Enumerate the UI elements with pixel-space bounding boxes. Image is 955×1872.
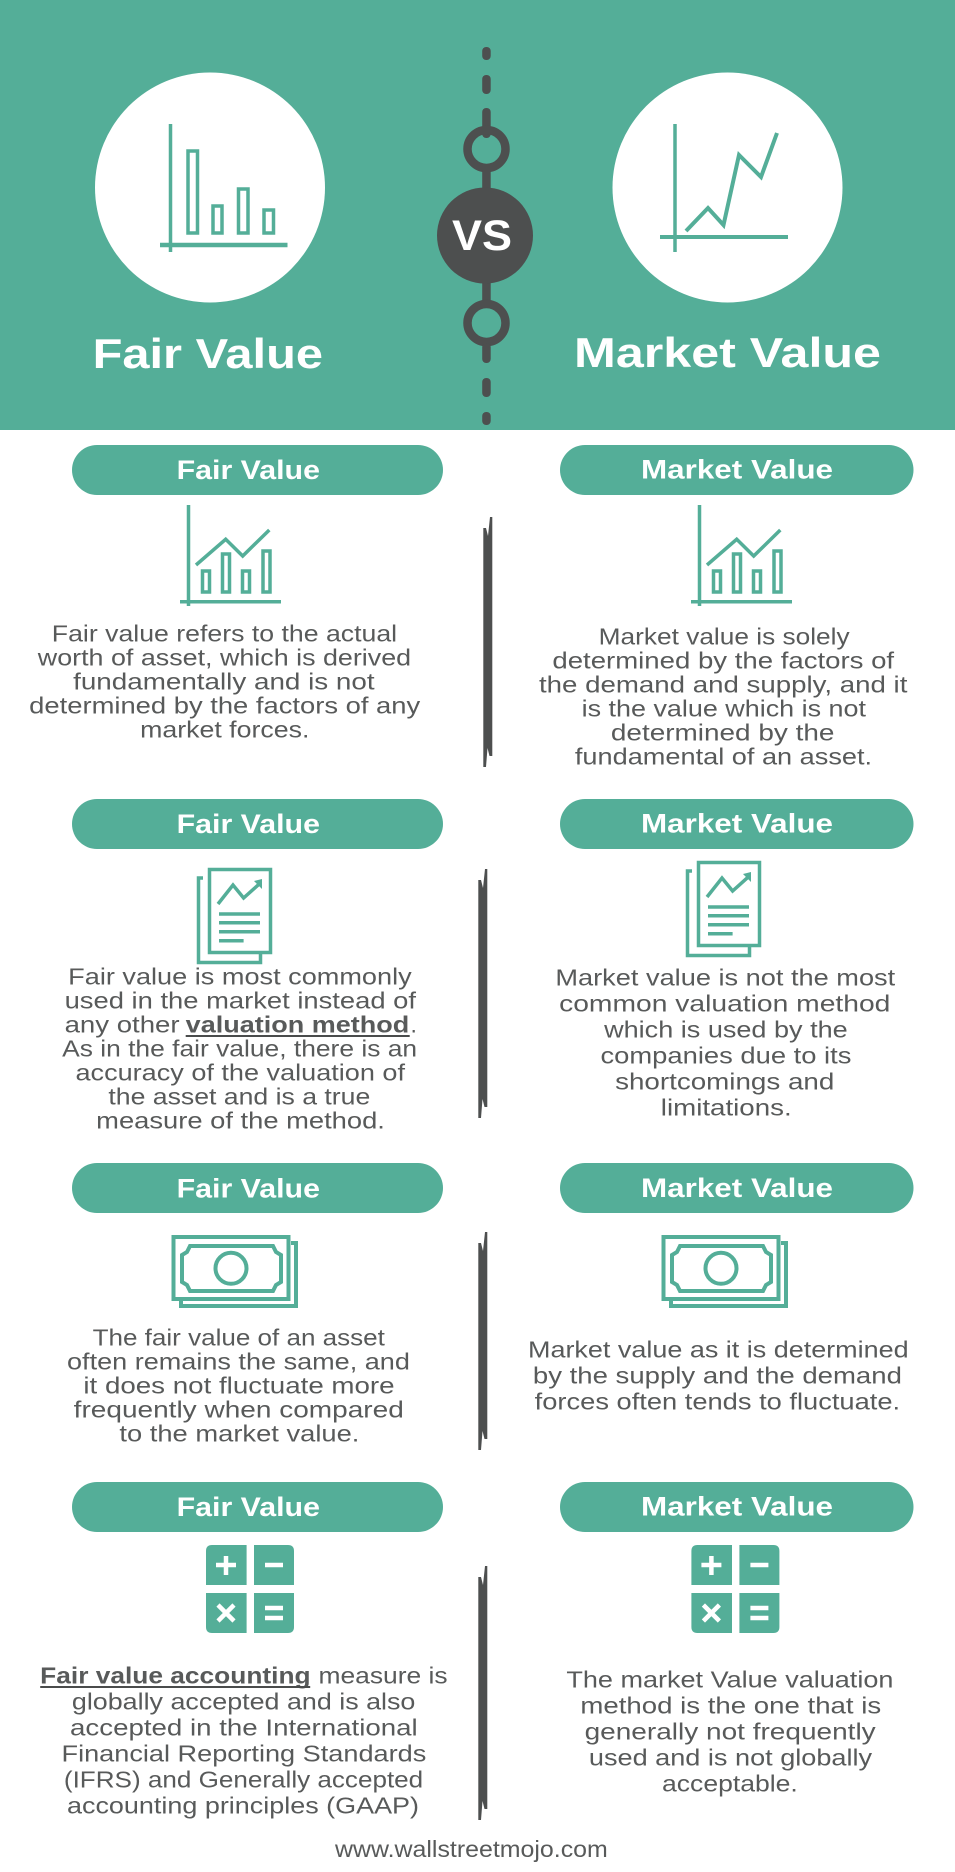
text: acceptance: generally not frequently	[585, 1718, 876, 1744]
text: usage: shortcomings and	[615, 1069, 834, 1095]
text: stability: often remains the same, and	[67, 1349, 410, 1375]
panel: row 2 fair value	[62, 799, 443, 1134]
text: definition: fundamental of an asset.	[575, 743, 872, 769]
text: accounting: globally accepted and is also	[72, 1689, 415, 1715]
badge: VS	[437, 188, 533, 284]
divider: row 3	[478, 1232, 487, 1450]
pill heading	[560, 1163, 914, 1213]
heading: Fair Value: Fair Value	[93, 330, 323, 377]
panel: row 4 fair value	[40, 1482, 448, 1819]
text: usage: As in the fair value, there is an	[62, 1036, 417, 1062]
icon: fair value bar chart in circle	[95, 72, 325, 302]
panel: row 2 market value	[555, 799, 914, 1121]
text: acceptance	[566, 1666, 893, 1796]
text: usage: Fair value is most commonly	[68, 964, 412, 990]
divider: row 2	[478, 869, 487, 1118]
text: accounting	[40, 1663, 448, 1819]
icon: banknotes	[174, 1237, 296, 1306]
pill heading: Market Value	[641, 1492, 833, 1522]
text: accounting: accounting principles (GAAP)	[67, 1793, 419, 1819]
text: definition: Fair value refers to the actual	[52, 621, 397, 647]
text: acceptance: The market Value valuation	[566, 1666, 893, 1692]
text: accounting: measure is	[318, 1663, 448, 1689]
text: usage: limitations.	[661, 1095, 792, 1121]
panel: row 4 market value	[560, 1482, 914, 1796]
text: definition: determined by the	[611, 719, 834, 745]
text: stability: Market value as it is determined	[528, 1337, 909, 1363]
badge: VS: VS	[452, 212, 512, 260]
icon: calculator keys	[691, 1545, 779, 1633]
text: definition: is the value which is not	[582, 695, 867, 721]
pill heading: Market Value	[641, 455, 833, 485]
text: usage: measure of the method.	[96, 1108, 385, 1134]
pill heading: Fair Value	[177, 455, 320, 485]
text: stability: by the supply and the demand	[533, 1363, 902, 1389]
text: definition	[539, 623, 908, 769]
text: usage: common valuation method	[559, 991, 890, 1017]
text: acceptance: acceptable.	[662, 1770, 798, 1796]
vs divider with rings	[437, 47, 533, 425]
heading: Market Value: Market Value	[574, 329, 881, 376]
text: usage	[555, 965, 896, 1121]
pill heading: Fair Value	[177, 1492, 320, 1522]
pill heading	[560, 799, 914, 849]
pill heading	[560, 445, 914, 495]
pill heading	[72, 445, 443, 495]
text: usage	[62, 964, 417, 1134]
text: definition: determined by the factors of	[552, 647, 895, 673]
text: stability: to the market value.	[119, 1421, 359, 1447]
text: stability	[528, 1337, 909, 1415]
text: definition: the demand and supply, and it	[539, 671, 908, 697]
pill heading	[72, 1163, 443, 1213]
text: accounting: Fair value accounting	[40, 1663, 311, 1689]
panel: row 1 market value	[539, 445, 914, 769]
icon: banknotes	[664, 1237, 786, 1306]
text: acceptance: method is the one that is	[580, 1692, 881, 1718]
pill heading: Fair Value	[177, 809, 320, 839]
text: stability	[67, 1325, 410, 1447]
text: usage: used in the market instead of	[65, 988, 417, 1014]
divider: row 4	[478, 1566, 487, 1820]
text: definition: worth of asset, which is derived	[37, 645, 411, 671]
pill heading	[560, 1482, 914, 1532]
icon: report document	[198, 870, 270, 962]
text: usage: the asset and is a true	[108, 1084, 370, 1110]
divider: row 1	[483, 517, 492, 767]
icon: calculator keys	[206, 1545, 294, 1633]
footer: website: www.wallstreetmojo.com	[334, 1836, 608, 1862]
panel: row 3 fair value	[67, 1163, 443, 1447]
icon: growth chart	[691, 505, 792, 606]
pill heading	[72, 1482, 443, 1532]
icon: market value line chart in circle	[612, 72, 842, 302]
text: usage: companies due to its	[600, 1043, 851, 1069]
panel: row 1 fair value	[29, 445, 443, 743]
pill heading: Market Value	[641, 809, 833, 839]
text: accounting: Financial Reporting Standards	[62, 1741, 426, 1767]
pill heading: Fair Value	[177, 1174, 320, 1204]
text: usage: accuracy of the valuation of	[76, 1060, 406, 1086]
text: usage: which is used by the	[603, 1017, 848, 1043]
text: usage: .	[410, 1012, 417, 1038]
text: stability: it does not fluctuate more	[83, 1373, 395, 1399]
text: usage: valuation method	[186, 1012, 409, 1038]
text: usage: any other	[65, 1012, 180, 1038]
panel: row 3 market value	[528, 1163, 914, 1415]
text: definition: Market value is solely	[599, 623, 850, 649]
text: definition: market forces.	[140, 717, 309, 743]
text: acceptance: used and is not globally	[589, 1744, 873, 1770]
text: stability: frequently when compared	[74, 1397, 404, 1423]
text: usage: Market value is not the most	[555, 965, 896, 991]
icon: growth chart	[180, 505, 281, 606]
text: definition	[29, 621, 421, 743]
text: definition: determined by the factors of any	[29, 693, 421, 719]
pill heading: Market Value	[641, 1173, 833, 1203]
icon: report document	[688, 862, 760, 956]
text: stability: forces often tends to fluctuate.	[535, 1389, 900, 1415]
text: accounting: accepted in the International	[70, 1715, 418, 1741]
pill heading	[72, 799, 443, 849]
text: stability: The fair value of an asset	[93, 1325, 386, 1351]
text: definition: fundamentally and is not	[73, 669, 375, 695]
panel: header	[0, 0, 955, 430]
text: accounting: (IFRS) and Generally accepted	[64, 1767, 423, 1793]
